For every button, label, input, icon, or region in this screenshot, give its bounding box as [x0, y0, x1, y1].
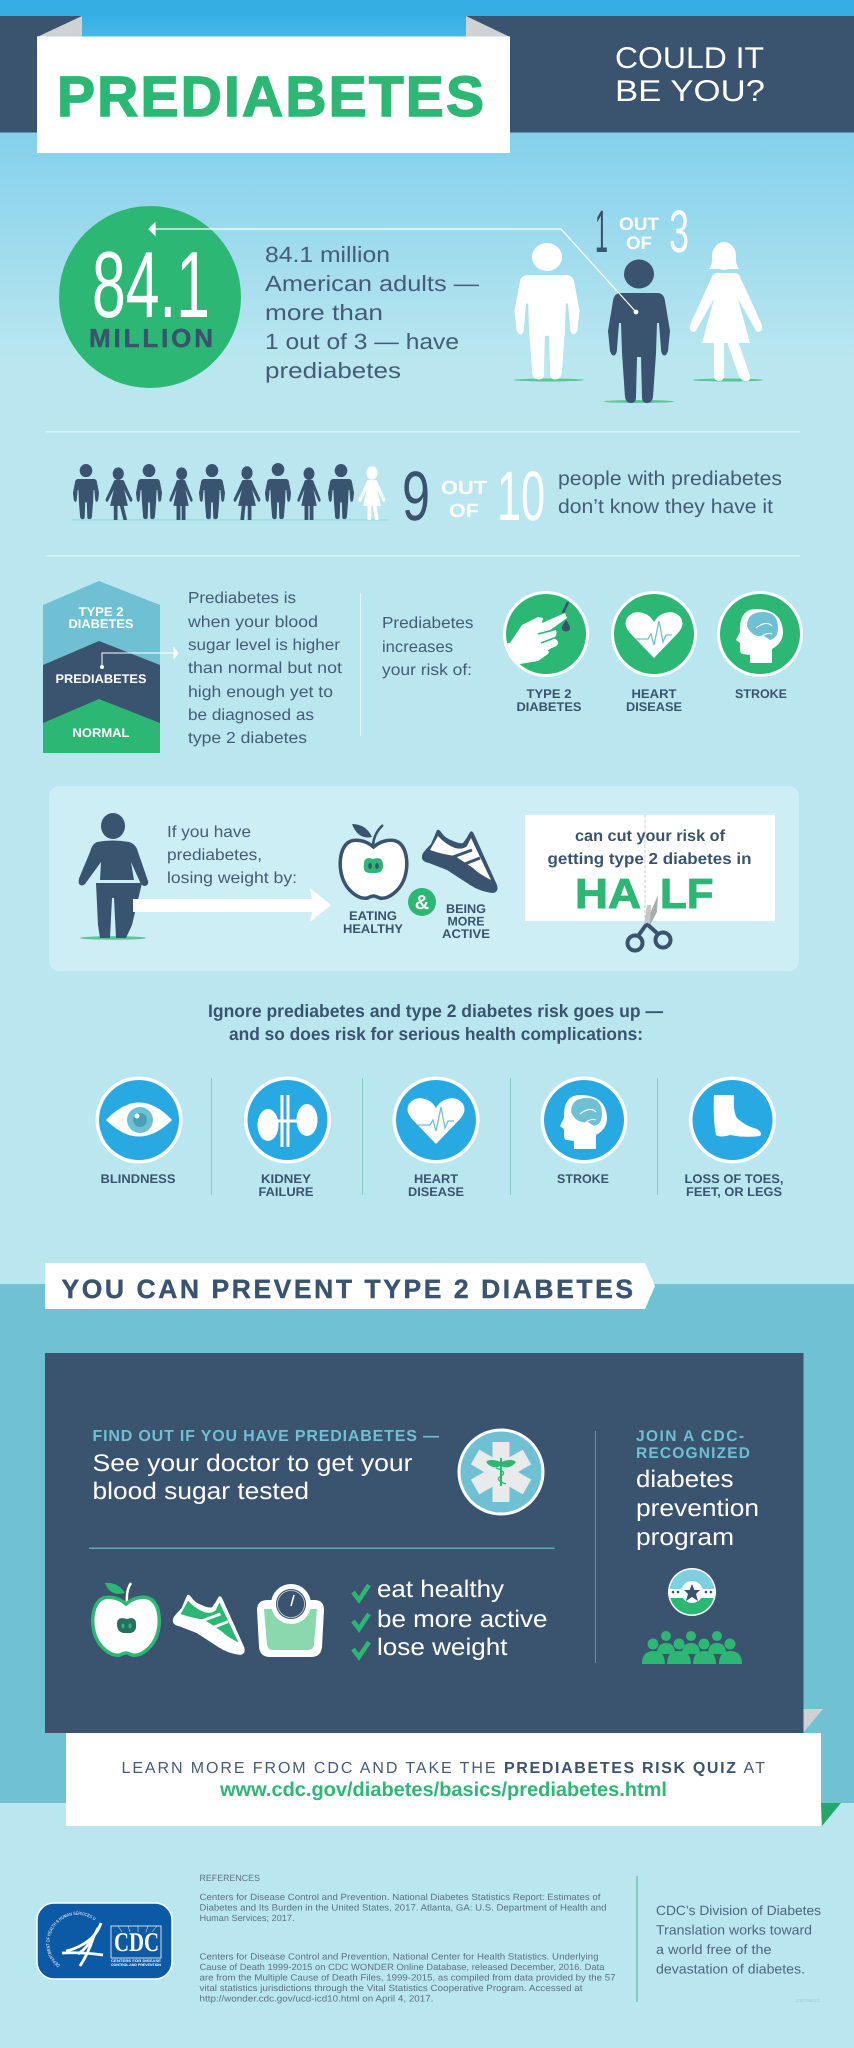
text: join program: RECOGNIZED: [636, 1445, 750, 1462]
text: find out: [92, 1428, 439, 1505]
text: if you have: losing weight by:: [167, 870, 297, 887]
definition text: sugar level is higher: [188, 637, 341, 654]
publication code: CS278911C: [796, 1998, 820, 2003]
icon: stroke: [540, 1076, 628, 1164]
risk text: [382, 615, 474, 679]
stat text: [265, 242, 479, 383]
logo: HHS and CDC: [36, 1902, 173, 1980]
callout: cut risk in half: [525, 815, 775, 921]
title: PREDIABETES: [57, 65, 484, 129]
text: find out: blood sugar tested: [92, 1478, 309, 1505]
panel: learn more: PREDIABETES RISK QUIZ: [504, 1760, 736, 1777]
1 out of 3 label: [595, 198, 689, 265]
icon: finger prick: [498, 591, 589, 677]
references: Diabetes and Its Burden in the United States, 2017. Atlanta, GA: U.S. Department of Health and: [200, 1902, 606, 1912]
complication labels: HEART: [414, 1172, 458, 1186]
callout: cut risk in half: LF: [660, 870, 714, 917]
icon: ampersand: &: [415, 892, 429, 914]
stat circle: 84.1 million: MILLION: [89, 323, 213, 353]
definition text: when your blood: [187, 614, 318, 631]
text: join program: JOIN A CDC-: [636, 1428, 744, 1445]
person: dark man: [604, 260, 674, 403]
text: if you have: prediabetes,: [167, 847, 262, 864]
labels: eating healthy, being more active: HEALTHY: [343, 922, 404, 936]
banner: you can prevent: YOU CAN PREVENT TYPE 2 DIABETES: [62, 1274, 633, 1304]
stat text: prediabetes: [265, 358, 401, 383]
9 out of 10 label: 10: [497, 457, 545, 535]
9 out of 10 label: 9: [402, 457, 430, 535]
icon: green shoe: [173, 1595, 245, 1655]
definition text: [187, 590, 343, 747]
icon: kidney failure: [244, 1076, 331, 1164]
checklist: [353, 1576, 548, 1661]
complication labels: FAILURE: [258, 1185, 314, 1199]
stacked arrows: blood sugar levels: [43, 581, 160, 753]
definition text: high enough yet to: [188, 684, 333, 701]
callout: cut risk in half: HA: [575, 870, 641, 917]
heading: complications: [208, 1001, 663, 1044]
references: [200, 1873, 616, 2004]
complication labels: DISEASE: [408, 1185, 464, 1199]
risk labels: TYPE 2: [526, 687, 572, 701]
logo: HHS and CDC: CDC: [114, 1927, 159, 1957]
complication labels: KIDNEY: [261, 1172, 312, 1186]
definition text: type 2 diabetes: [188, 730, 307, 747]
9 out of 10 label: [402, 457, 545, 535]
risk labels: DISEASE: [626, 700, 682, 714]
risk text: increases: [382, 639, 453, 656]
risk text: Prediabetes: [382, 615, 474, 632]
labels: eating healthy, being more active: [343, 902, 490, 941]
text: division statement: Translation works toward: [656, 1922, 812, 1938]
header band: [0, 16, 854, 153]
risk labels: DIABETES: [516, 700, 582, 714]
panel: learn more: LEARN MORE FROM CDC AND TAKE THE: [122, 1760, 496, 1777]
text: division statement: CDC’s Division of Diabetes: [656, 1903, 821, 1918]
stat text: 84.1 million: [265, 242, 390, 267]
references: Centers for Disease Control and Prevention, National Center for Health Statistics. Underlying: [200, 1952, 598, 1962]
checklist: lose weight: [377, 1634, 508, 1661]
icon: apple: [340, 824, 407, 898]
panel: learn more: www.cdc.gov/diabetes/basics/prediabetes.html: [219, 1779, 667, 1801]
stacked arrows: blood sugar levels: TYPE 2: [78, 605, 124, 619]
panel: learn more: AT: [744, 1760, 765, 1777]
text: join program: diabetes: [636, 1466, 734, 1493]
person: white man: [514, 243, 584, 382]
definition text: Prediabetes is: [188, 590, 296, 607]
labels: eating healthy, being more active: EATING: [349, 909, 397, 923]
nine out of ten text: [558, 468, 782, 518]
nine out of ten text: don’t know they have it: [558, 496, 773, 518]
icon: foot: [689, 1076, 776, 1164]
arrow: weight loss: [133, 888, 331, 922]
labels: eating healthy, being more active: ACTIVE: [442, 927, 490, 941]
icon: heart: [611, 591, 697, 677]
heading: complications: and so does risk for serious health complications:: [229, 1024, 643, 1044]
icon: person losing weight: [79, 813, 148, 940]
icon: stroke brain: [717, 591, 803, 677]
subtitle: [615, 42, 765, 108]
subtitle: BE YOU?: [615, 75, 765, 108]
stat text: more than: [265, 300, 383, 325]
text: if you have: If you have: [167, 824, 251, 841]
panel: prevention steps: [45, 1353, 804, 1733]
panel: learn more: [66, 1733, 821, 1826]
9 out of 10 label: OUT: [441, 478, 487, 499]
1 out of 3 label: 1: [595, 198, 608, 265]
1 out of 3 label: OF: [626, 233, 652, 253]
icon: group of people: [642, 1631, 742, 1664]
icon: heart disease: [392, 1076, 480, 1164]
text: join program: prevention: [636, 1495, 759, 1522]
stat circle: 84.1 million: 84.1: [92, 232, 210, 337]
text: join program: program: [636, 1524, 734, 1551]
references: Centers for Disease Control and Prevention. National Diabetes Statistics Report: Estimates of: [200, 1892, 601, 1902]
panel: losing weight: [49, 786, 799, 971]
arrow: prediabetes to definition: [100, 648, 178, 668]
definition text: be diagnosed as: [188, 707, 314, 724]
complication labels: STROKE: [557, 1172, 609, 1186]
text: division statement: devastation of diabetes.: [656, 1962, 805, 1976]
1 out of 3 label: OUT: [619, 214, 659, 234]
complication labels: [100, 1172, 784, 1199]
references: Cause of Death 1999-2015 on CDC WONDER Online Database, released December, 2016. Data: [200, 1962, 604, 1972]
fold: grey corner: [803, 1709, 823, 1733]
1 out of 3 label: 3: [669, 198, 689, 265]
text: join program: [636, 1428, 759, 1551]
risk labels: [516, 687, 787, 714]
logo: HHS and CDC: DEPARTMENT OF HEALTH & HUMAN SERVICES USA: [46, 1912, 96, 1968]
references: are from the Multiple Cause of Death Files, 1999-2015, as compiled from data provided by the 57: [200, 1972, 616, 1982]
references: http://wonder.cdc.gov/ucd-icd10.html on April 4, 2017.: [200, 1994, 434, 2004]
text: find out: FIND OUT IF YOU HAVE PREDIABETES —: [92, 1428, 439, 1445]
risk labels: HEART: [632, 687, 677, 701]
icon: blindness: [96, 1076, 182, 1164]
references: REFERENCES: [200, 1873, 260, 1883]
icon: shoe: [422, 830, 498, 893]
icon: ampersand: [408, 888, 436, 916]
icon: medical star: [458, 1428, 544, 1516]
row of ten people: [72, 463, 388, 520]
icon: scale: [257, 1584, 324, 1657]
stat text: American adults —: [265, 271, 479, 296]
checklist: eat healthy: [377, 1576, 504, 1603]
checklist: be more active: [377, 1606, 548, 1633]
complication labels: LOSS OF TOES,: [684, 1172, 784, 1186]
callout: cut risk in half: getting type 2 diabetes in: [548, 851, 752, 868]
callout: cut risk in half: can cut your risk of: [575, 828, 726, 845]
stat circle: 84.1 million: [59, 206, 241, 388]
risk labels: STROKE: [735, 687, 787, 701]
text: find out: See your doctor to get your: [92, 1450, 413, 1477]
stacked arrows: blood sugar levels: NORMAL: [72, 726, 130, 740]
stacked arrows: blood sugar levels: DIABETES: [68, 617, 134, 631]
icon: green apple: [93, 1583, 159, 1655]
labels: eating healthy, being more active: BEING: [446, 902, 486, 916]
text: division statement: a world free of the: [656, 1942, 772, 1957]
complication labels: FEET, OR LEGS: [686, 1185, 782, 1199]
stacked arrows: blood sugar levels: PREDIABETES: [56, 672, 146, 686]
heading: complications: Ignore prediabetes and type 2 diabetes risk goes up —: [208, 1001, 663, 1021]
fold: green corner: [821, 1803, 841, 1826]
definition text: than normal but not: [188, 660, 343, 677]
references: Human Services; 2017.: [200, 1913, 294, 1923]
stat text: 1 out of 3 — have: [265, 329, 459, 354]
icon: scissors: [628, 895, 670, 950]
nine out of ten text: people with prediabetes: [558, 468, 782, 490]
risk text: your risk of:: [382, 662, 472, 679]
subtitle: COULD IT: [615, 42, 764, 75]
banner: you can prevent: [45, 1263, 655, 1309]
complication labels: BLINDNESS: [100, 1172, 176, 1186]
9 out of 10 label: OF: [449, 501, 479, 522]
labels: eating healthy, being more active: MORE: [448, 914, 484, 928]
arrow: pointer line from circle to person: [149, 223, 638, 314]
text: division statement: [656, 1903, 821, 1976]
logo: HHS and CDC: CONTROL AND PREVENTION: [111, 1963, 161, 1967]
logo: HHS and CDC: CENTERS FOR DISEASE: [111, 1959, 162, 1963]
references: vital statistics jurisdictions through the Vital Statistics Cooperative Program. Accessed at: [200, 1983, 583, 1993]
text: if you have: [167, 824, 297, 887]
icon: program badge: [668, 1568, 716, 1616]
person: white woman: [690, 242, 763, 382]
